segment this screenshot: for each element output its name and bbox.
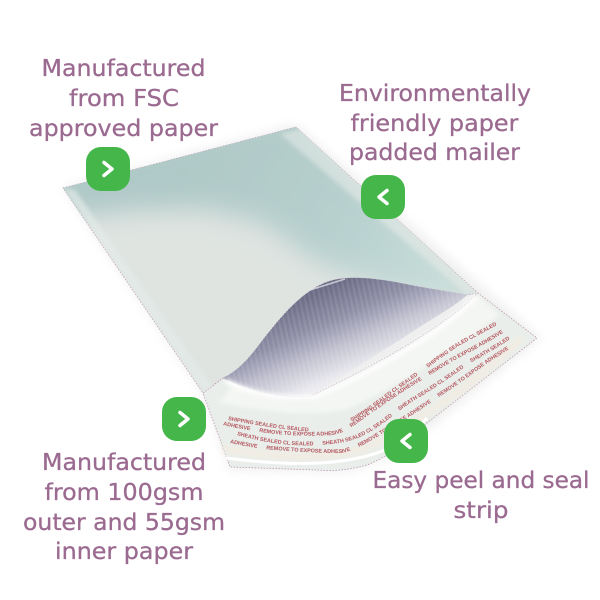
mailer: paper padded envelope	[62, 126, 537, 472]
text: manufactured from 100gsm outer and 55gsm inner paper	[23, 448, 225, 565]
text: easy peel and seal strip	[372, 466, 590, 524]
text: manufactured from FSC approved paper: approved paper	[29, 114, 218, 142]
icon: green right chevron button top left	[86, 147, 130, 191]
text: easy peel and seal strip: strip	[454, 496, 508, 524]
text: manufactured from FSC approved paper: Manufactured	[42, 54, 206, 82]
text: environmentally friendly paper padded mailer: friendly paper	[350, 109, 519, 137]
text: environmentally friendly paper padded mailer: Environmentally	[339, 79, 531, 107]
text: manufactured from 100gsm outer and 55gsm inner paper: Manufactured	[42, 448, 206, 476]
peel strip red printed text: SHEATH SEALED CL SEALED SHEATH SEALED CL SEALED SHEATH SEALED CL SEALED SHEATH SEALED	[237, 336, 510, 446]
interior ridges	[228, 278, 426, 376]
icon: green left chevron button bottom right	[384, 419, 428, 463]
flap green tint	[63, 127, 478, 393]
text: manufactured from FSC approved paper: from FSC	[69, 84, 179, 112]
text: environmentally friendly paper padded mailer: padded mailer	[349, 138, 520, 166]
text: manufactured from FSC approved paper	[29, 54, 218, 142]
text: easy peel and seal strip: Easy peel and seal	[372, 466, 590, 494]
text: manufactured from 100gsm outer and 55gsm inner paper: outer and 55gsm	[23, 508, 225, 536]
peel strip red printed text: ADHESIVE REMOVE TO EXPOSE ADHESIVE REMOVE TO EXPOSE ADHESIVE REMOVE TO EXPOSE ADHESIVE	[230, 346, 509, 453]
peel strip red printed text: ADHESIVE REMOVE TO EXPOSE ADHESIVE REMOVE TO EXPOSE ADHESIVE REMOVE TO EXPOSE ADHESIVE	[223, 330, 504, 436]
flap fold highlight	[226, 296, 477, 398]
mailer interior padding	[223, 278, 467, 396]
text: manufactured from 100gsm outer and 55gsm inner paper: inner paper	[55, 537, 193, 565]
mailer front with peel strip	[203, 293, 537, 470]
icon: green right chevron button bottom left	[162, 397, 206, 441]
mailer back flap	[63, 127, 478, 393]
text: manufactured from 100gsm outer and 55gsm inner paper: from 100gsm	[44, 478, 204, 506]
peel strip red printed text: SHIPPING SEALED CL SEALED SHIPPING SEALED CL SEALED SHIPPING SEALED CL SEALED	[228, 322, 496, 432]
icon: green left chevron button top right	[361, 175, 405, 219]
text: environmentally friendly paper padded mailer	[339, 79, 531, 166]
